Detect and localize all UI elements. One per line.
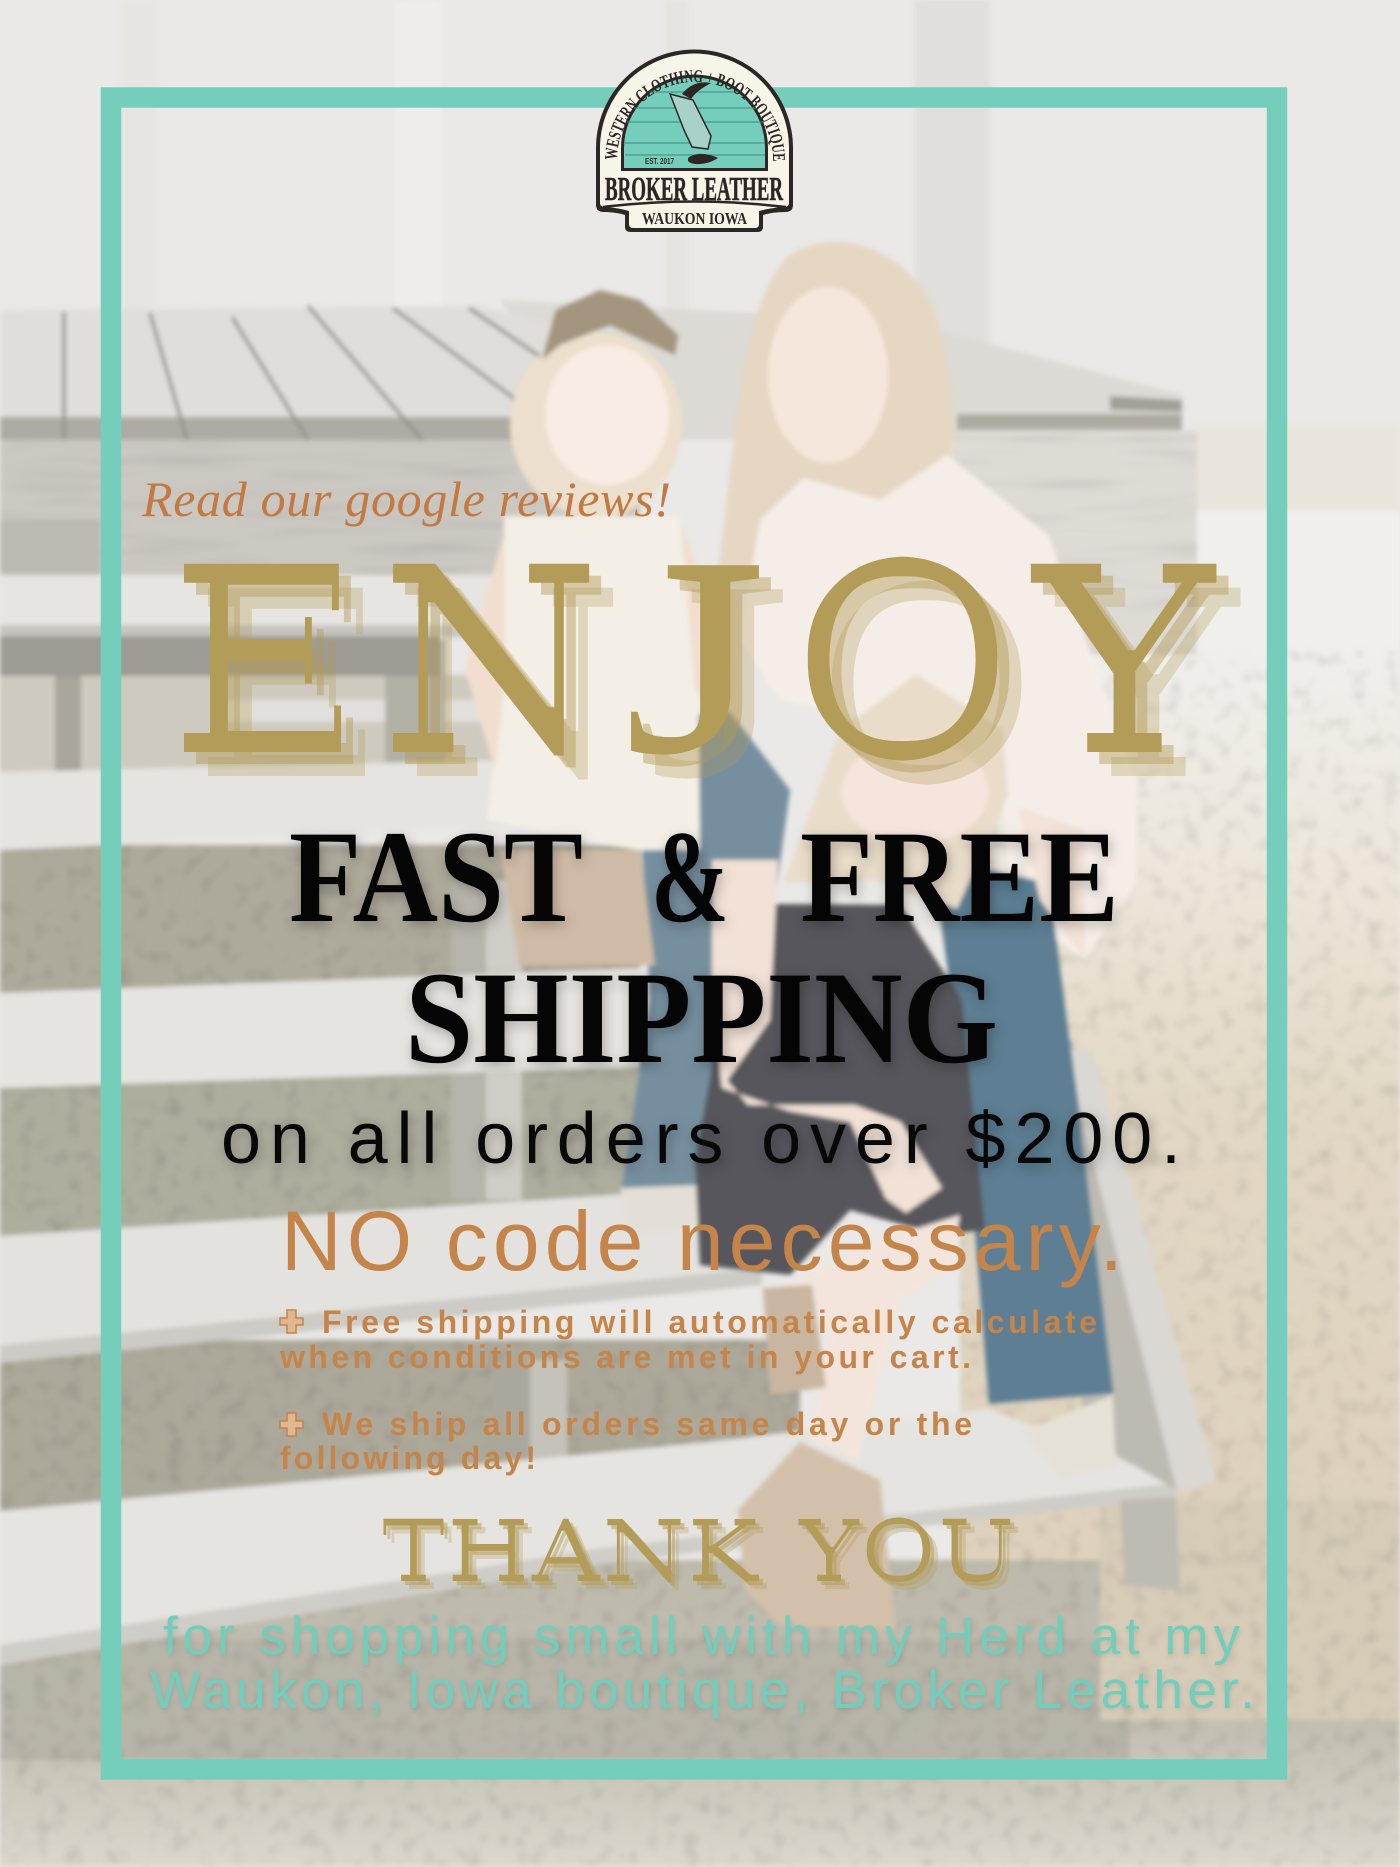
arched logo text: WESTERN CLOTHING + BOOT BOUTIQUE bbox=[605, 70, 785, 161]
closing message bbox=[150, 1607, 1255, 1720]
logo location: WAUKON IOWA bbox=[642, 209, 748, 228]
heading: ENJOY: Y bbox=[1028, 517, 1220, 808]
heading: ENJOY: J bbox=[632, 515, 782, 821]
closing message: for shopping small with my Herd at my bbox=[163, 1607, 1241, 1666]
icon: plus bbox=[280, 1413, 303, 1436]
subheading: order threshold: on all orders over $200. bbox=[221, 1099, 1181, 1179]
heading: FAST & FREE: & bbox=[651, 803, 729, 950]
heading: ENJOY: J bbox=[620, 503, 770, 809]
shipping notes: We ship all orders same day or the bbox=[322, 1406, 972, 1442]
second daughter bbox=[784, 674, 1008, 909]
heading: SHIPPING: SHIPPING bbox=[405, 944, 998, 1091]
heading: ENJOY: E bbox=[164, 517, 368, 808]
heading: ENJOY: N bbox=[378, 517, 604, 808]
heading: THANK YOU bbox=[381, 1505, 1024, 1608]
heading: ENJOY: O bbox=[799, 523, 1030, 828]
icon: cowboy boot bbox=[670, 82, 718, 164]
heading: ENJOY bbox=[164, 503, 1244, 840]
heading: FAST & FREE: FAST bbox=[289, 803, 583, 950]
heading: ENJOY: O bbox=[787, 511, 1018, 816]
heading: FAST & FREE bbox=[289, 803, 1119, 950]
heading: ENJOY: Y bbox=[1052, 541, 1244, 832]
shipping notes: following day! bbox=[280, 1440, 536, 1476]
shipping notes: Free shipping will automatically calculate bbox=[322, 1304, 1097, 1340]
heading: ENJOY: E bbox=[176, 529, 380, 820]
logo wordmark: BROKER LEATHER bbox=[605, 171, 783, 208]
icon: plus bbox=[280, 1310, 303, 1333]
heading: ENJOY: N bbox=[390, 529, 616, 820]
heading: THANK YOU: THANK bbox=[385, 1509, 765, 1604]
heading: THANK YOU: THANK bbox=[381, 1505, 761, 1600]
heading: THANK YOU: YOU bbox=[797, 1505, 1016, 1600]
heading: THANK YOU: YOU bbox=[801, 1509, 1020, 1604]
teal frame bbox=[111, 98, 1277, 1770]
heading: THANK YOU: THANK bbox=[389, 1513, 769, 1608]
mother bbox=[717, 242, 953, 580]
shipping notes bbox=[279, 1304, 1097, 1476]
script note: Read our google reviews! bbox=[141, 471, 671, 527]
closing message: Waukon, Iowa boutique, Broker Leather. bbox=[150, 1661, 1255, 1720]
est. 2017: EST. 2017 bbox=[645, 156, 674, 166]
heading: ENJOY: N bbox=[402, 541, 628, 832]
heading: ENJOY: E bbox=[188, 541, 392, 832]
heading: ENJOY: Y bbox=[1040, 529, 1232, 820]
heading: ENJOY: O bbox=[811, 535, 1042, 840]
first daughter bbox=[510, 333, 682, 517]
heading: FAST & FREE: FREE bbox=[800, 803, 1119, 950]
heading: ENJOY: J bbox=[644, 527, 794, 833]
shipping notes: when conditions are met in your cart. bbox=[279, 1339, 971, 1375]
heading: THANK YOU: YOU bbox=[805, 1513, 1024, 1608]
logo: Broker Leather badge bbox=[596, 50, 793, 232]
callout: no code necessary: NO code necessary. bbox=[281, 1194, 1123, 1288]
